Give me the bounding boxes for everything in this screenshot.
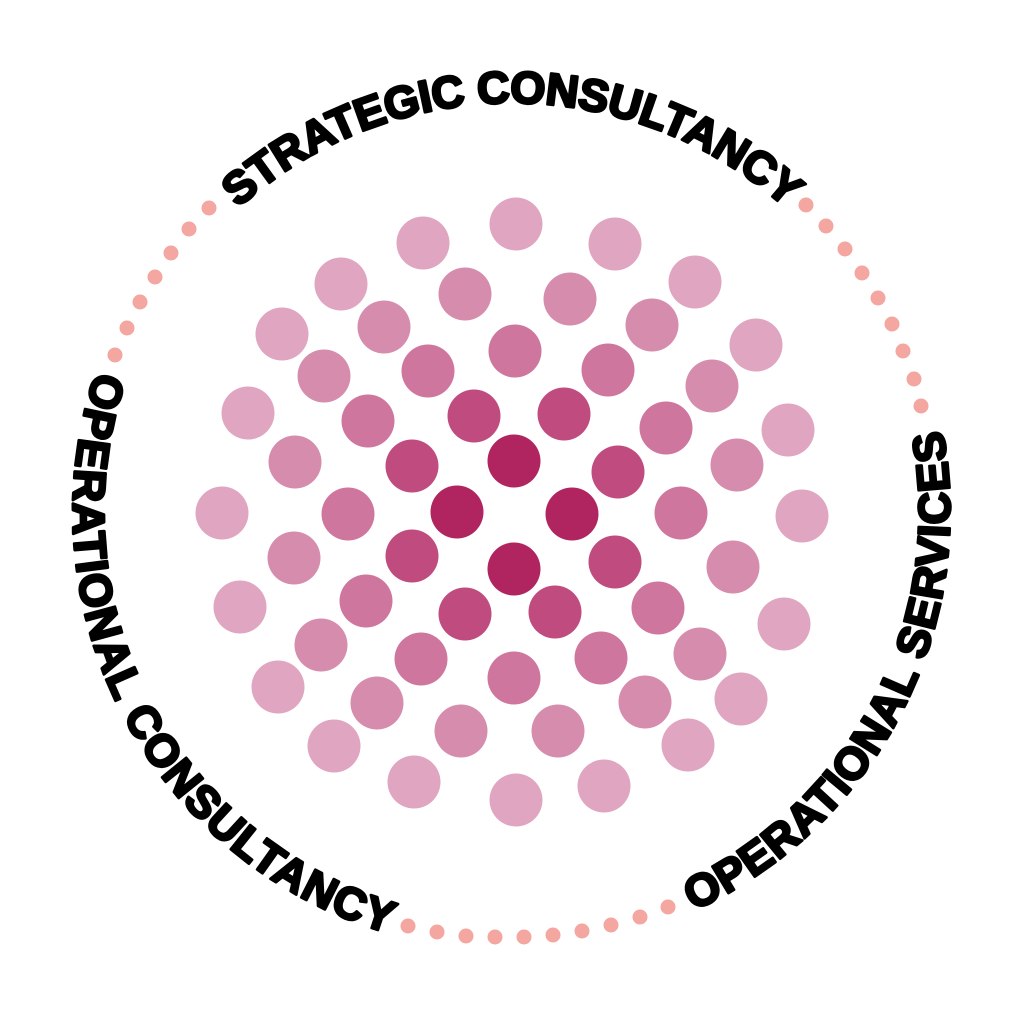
heading: Strategic Consultancy: STRATEGIC CONSULTANCY xyxy=(222,70,808,204)
dot cluster: centre ring xyxy=(430,434,598,596)
dotted arc: upper right xyxy=(798,198,928,414)
heading: Operational Services: OPERATIONAL SERVICES xyxy=(684,432,952,907)
dot cluster: fourth ring xyxy=(268,268,764,758)
dotted arc: bottom xyxy=(400,900,676,944)
dotted arc: upper left xyxy=(108,200,216,362)
dot cluster: outer ring xyxy=(196,198,828,826)
dot cluster: second ring xyxy=(386,388,644,640)
dot cluster: third ring xyxy=(322,324,708,704)
heading: Operational Consultancy: OPERATIONAL CONSULTANCY xyxy=(72,374,400,932)
